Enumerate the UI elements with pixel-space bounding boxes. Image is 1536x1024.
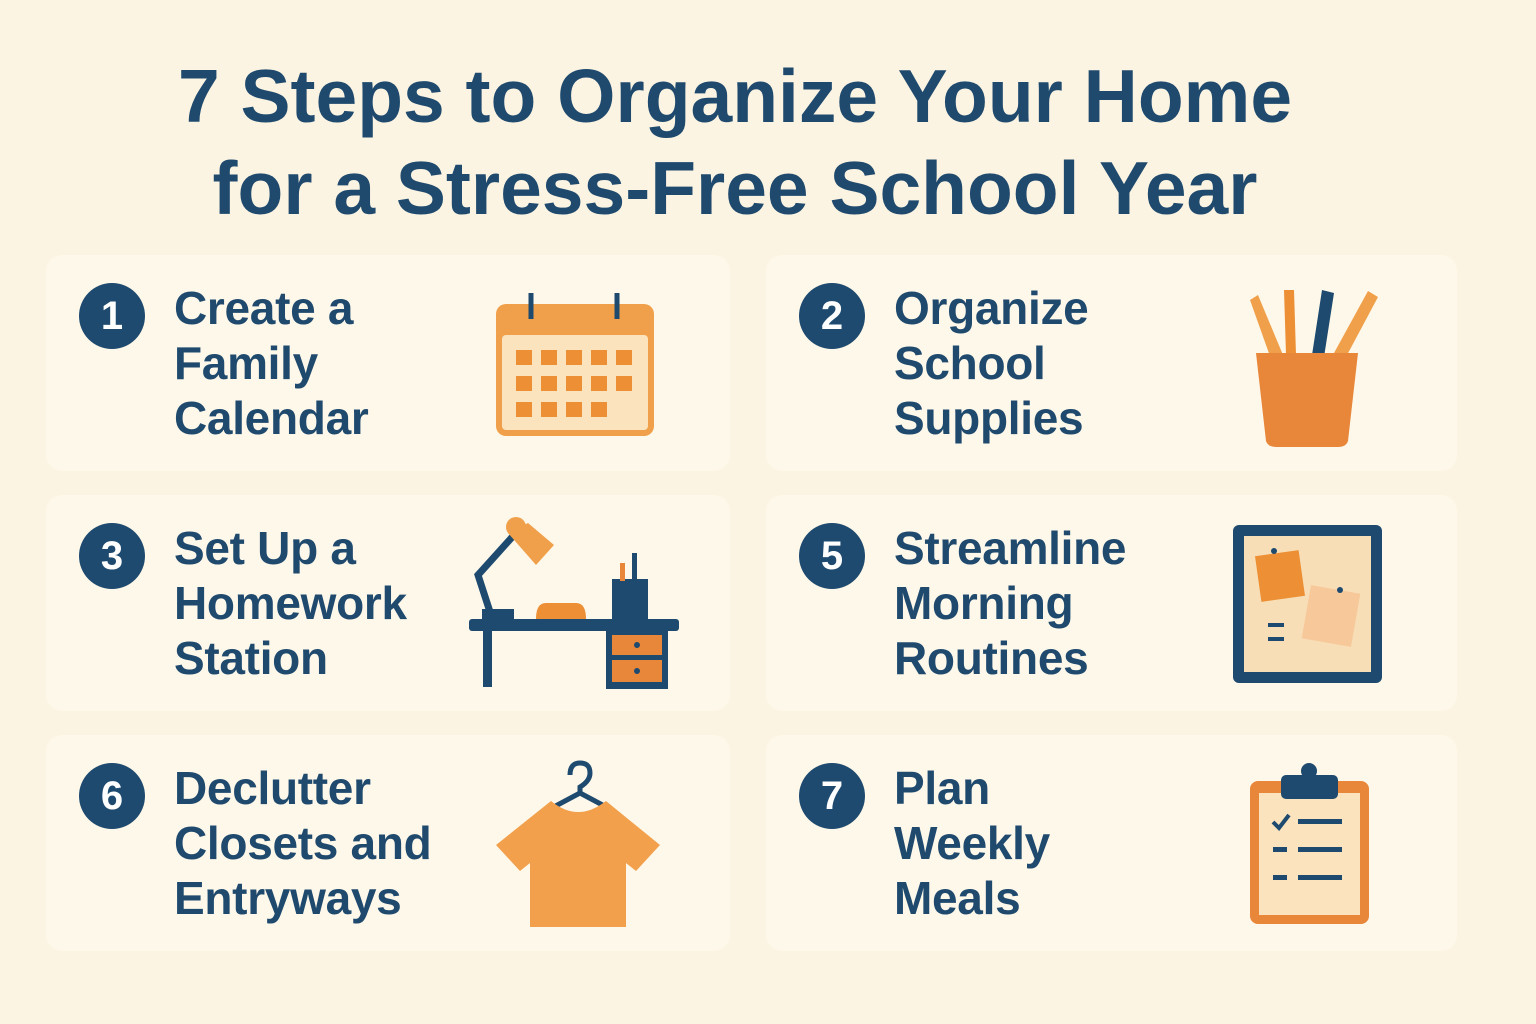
text 1: Family [174,337,318,389]
panel: step 2 [766,255,1457,471]
text 6: Entryways [174,872,401,924]
text 3 [174,522,408,684]
text 2: Supplies [894,392,1083,444]
text 3: Set Up a [174,522,356,574]
text 7: Meals [894,872,1020,924]
number 3: 3 [101,534,123,578]
panel: step 6 [46,735,730,951]
icon: pencil cup [1250,290,1378,447]
text 3: Homework [174,577,407,629]
number 7: 7 [821,774,843,818]
number 2: 2 [821,294,843,338]
number 1: 1 [101,294,123,338]
text 2 [894,282,1088,444]
text 1: Create a [174,282,353,334]
title [178,54,1292,230]
panel: step 5 [766,495,1457,711]
text 6: Closets and [174,817,431,869]
panel: step 7 [766,735,1457,951]
icon: clipboard checklist [1250,763,1369,924]
text 1: Calendar [174,392,368,444]
panel: step 1 [46,255,730,471]
text 7: Plan [894,762,990,814]
icon: calendar [496,293,654,436]
icon: desk with lamp [469,517,679,689]
title: 7 Steps to Organize Your Home [178,54,1292,138]
text 3: Station [174,632,328,684]
text 5: Morning [894,577,1073,629]
text 5 [894,522,1126,684]
text 7 [894,762,1050,924]
text 1 [174,282,368,444]
text 2: Organize [894,282,1088,334]
text 5: Streamline [894,522,1126,574]
number 7 [799,763,865,829]
number 2 [799,283,865,349]
text 5: Routines [894,632,1088,684]
text 6 [174,762,431,924]
title: for a Stress-Free School Year [213,146,1257,230]
number 6: 6 [101,774,123,818]
number 1 [79,283,145,349]
number 3 [79,523,145,589]
text 2: School [894,337,1046,389]
number 6 [79,763,145,829]
number 5: 5 [821,534,843,578]
panel: step 3 [46,495,730,711]
text 7: Weekly [894,817,1050,869]
icon: bulletin board [1233,525,1382,683]
number 5 [799,523,865,589]
icon: shirt on hanger [496,760,660,927]
text 6: Declutter [174,762,371,814]
